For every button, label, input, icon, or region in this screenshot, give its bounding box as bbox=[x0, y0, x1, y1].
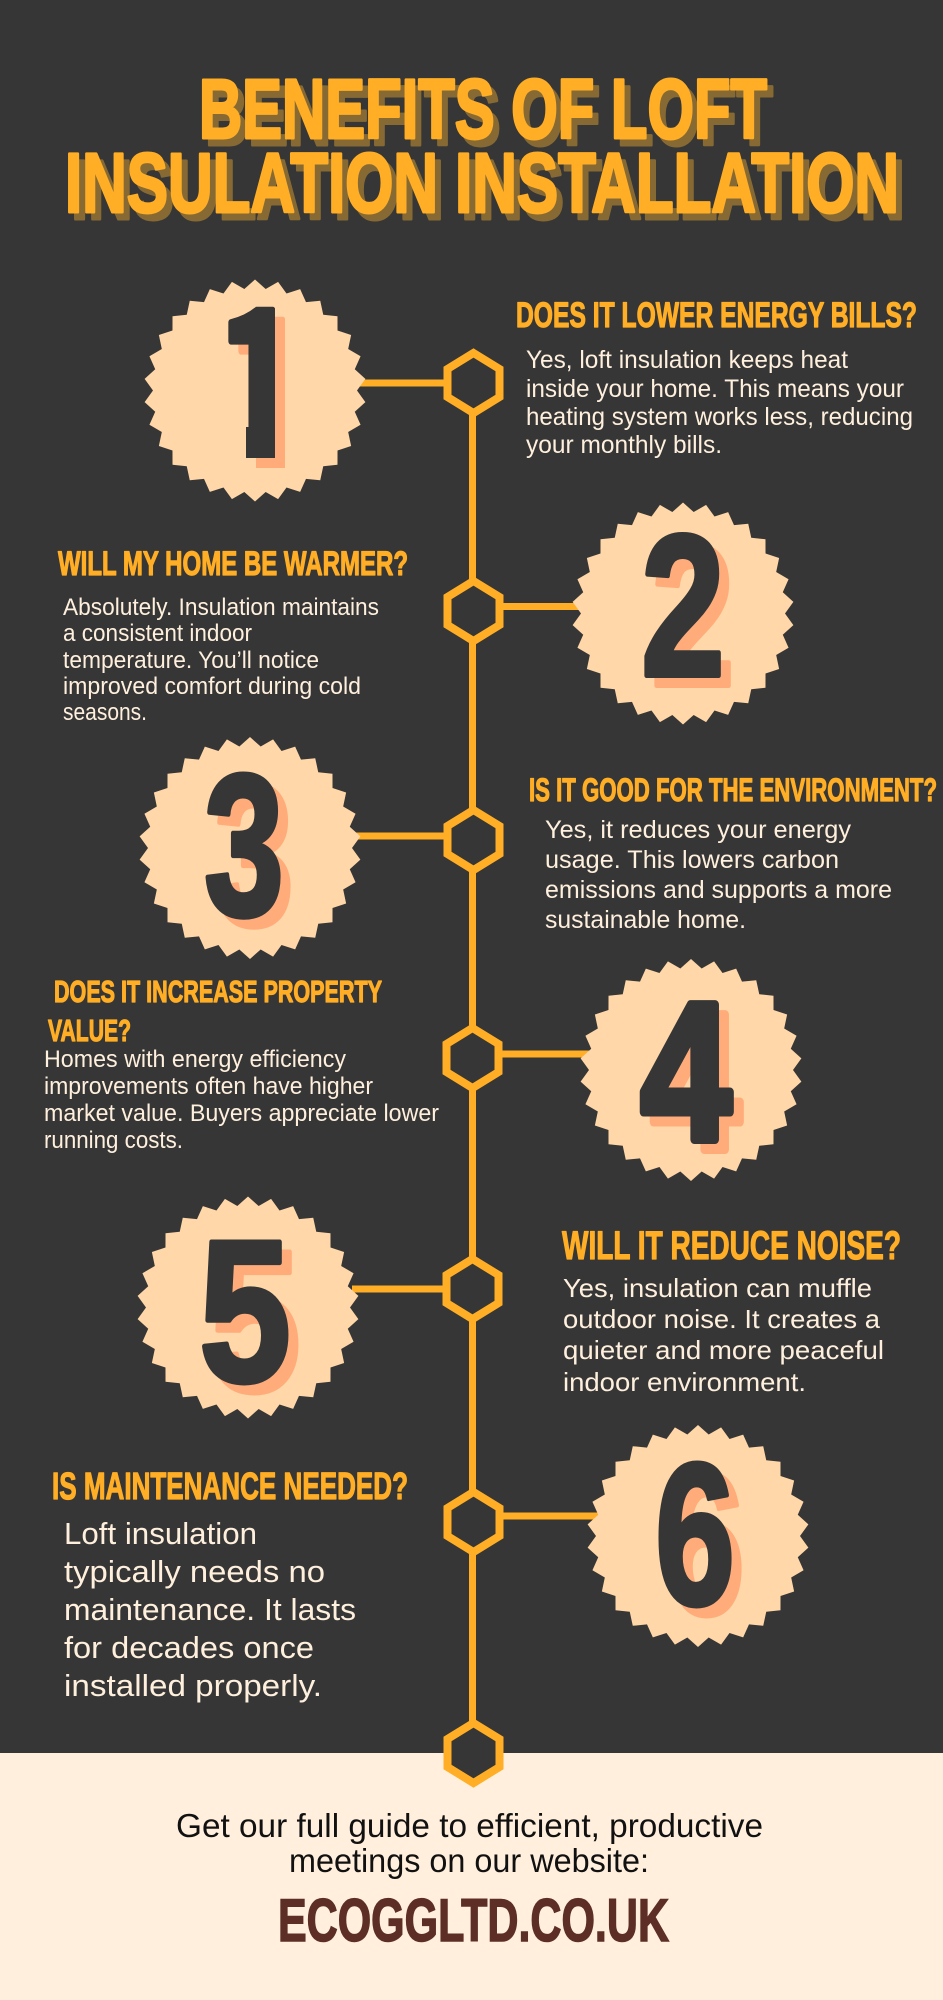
text block 3 bbox=[529, 772, 937, 934]
text block 6: for decades once bbox=[64, 1630, 314, 1665]
text block 6: IS MAINTENANCE NEEDED? bbox=[52, 1466, 408, 1508]
footer panel bbox=[0, 1753, 943, 2000]
text block 4 bbox=[44, 974, 439, 1154]
text block 5: indoor environment. bbox=[563, 1367, 806, 1397]
text block 4: VALUE? bbox=[48, 1013, 131, 1048]
badge 1 bbox=[144, 280, 366, 502]
text block 5 bbox=[562, 1224, 901, 1397]
text block 3: emissions and supports a more bbox=[545, 876, 892, 904]
text block 1: heating system works less, reducing bbox=[526, 403, 913, 431]
text block 4: DOES IT INCREASE PROPERTY bbox=[54, 974, 382, 1009]
badge 2: 2 bbox=[641, 492, 725, 718]
badge 5 bbox=[138, 1196, 358, 1424]
text block 4: market value. Buyers appreciate lower bbox=[44, 1100, 439, 1127]
text block 2: temperature. You’ll notice bbox=[63, 647, 319, 674]
text block 6: typically needs no bbox=[64, 1554, 325, 1589]
text block 1 bbox=[516, 296, 917, 459]
badge 4: 4 bbox=[641, 962, 731, 1182]
badge 5: 5 bbox=[199, 1198, 291, 1424]
text block 2: WILL MY HOME BE WARMER? bbox=[58, 545, 408, 583]
text block 3: usage. This lowers carbon bbox=[545, 846, 839, 874]
badge 6: 6 bbox=[655, 1421, 735, 1647]
text block 4: running costs. bbox=[44, 1127, 183, 1154]
footer website: ECOGGLTD.CO.UK bbox=[278, 1887, 669, 1954]
text block 5: outdoor noise. It creates a bbox=[563, 1304, 881, 1334]
text block 2: Absolutely. Insulation maintains bbox=[63, 594, 379, 621]
text block 4: improvements often have higher bbox=[44, 1073, 373, 1100]
text block 2: improved comfort during cold bbox=[63, 673, 361, 700]
badge 4 bbox=[581, 959, 801, 1182]
footer call to action: meetings on our website: bbox=[289, 1842, 649, 1879]
badge 3 bbox=[140, 732, 360, 959]
text block 3: sustainable home. bbox=[545, 906, 746, 934]
text block 1: Yes, loft insulation keeps heat bbox=[526, 346, 848, 374]
text block 6: Loft insulation bbox=[64, 1516, 257, 1551]
text block 1: inside your home. This means your bbox=[526, 375, 904, 403]
text block 2: a consistent indoor bbox=[63, 620, 252, 647]
title bbox=[65, 62, 899, 230]
text block 3: Yes, it reduces your energy bbox=[545, 816, 852, 844]
footer call to action bbox=[176, 1807, 763, 1879]
badge 2 bbox=[573, 492, 793, 724]
badge 1: 1 bbox=[215, 222, 303, 512]
badge 3: 3 bbox=[204, 732, 284, 958]
text block 1: your monthly bills. bbox=[526, 431, 722, 459]
text block 2: seasons. bbox=[63, 699, 147, 726]
text block 5: Yes, insulation can muffle bbox=[563, 1273, 872, 1303]
badge 6 bbox=[588, 1421, 808, 1647]
text block 6: maintenance. It lasts bbox=[64, 1592, 356, 1627]
text block 6 bbox=[52, 1466, 408, 1703]
text block 6: installed properly. bbox=[64, 1668, 322, 1703]
text block 4: Homes with energy efficiency bbox=[44, 1046, 346, 1073]
timeline: spine, connectors and hexagon nodes bbox=[350, 353, 602, 1783]
footer call to action: Get our full guide to efficient, productive bbox=[176, 1807, 763, 1844]
text block 2 bbox=[58, 545, 408, 726]
text block 5: quieter and more peaceful bbox=[563, 1335, 884, 1365]
